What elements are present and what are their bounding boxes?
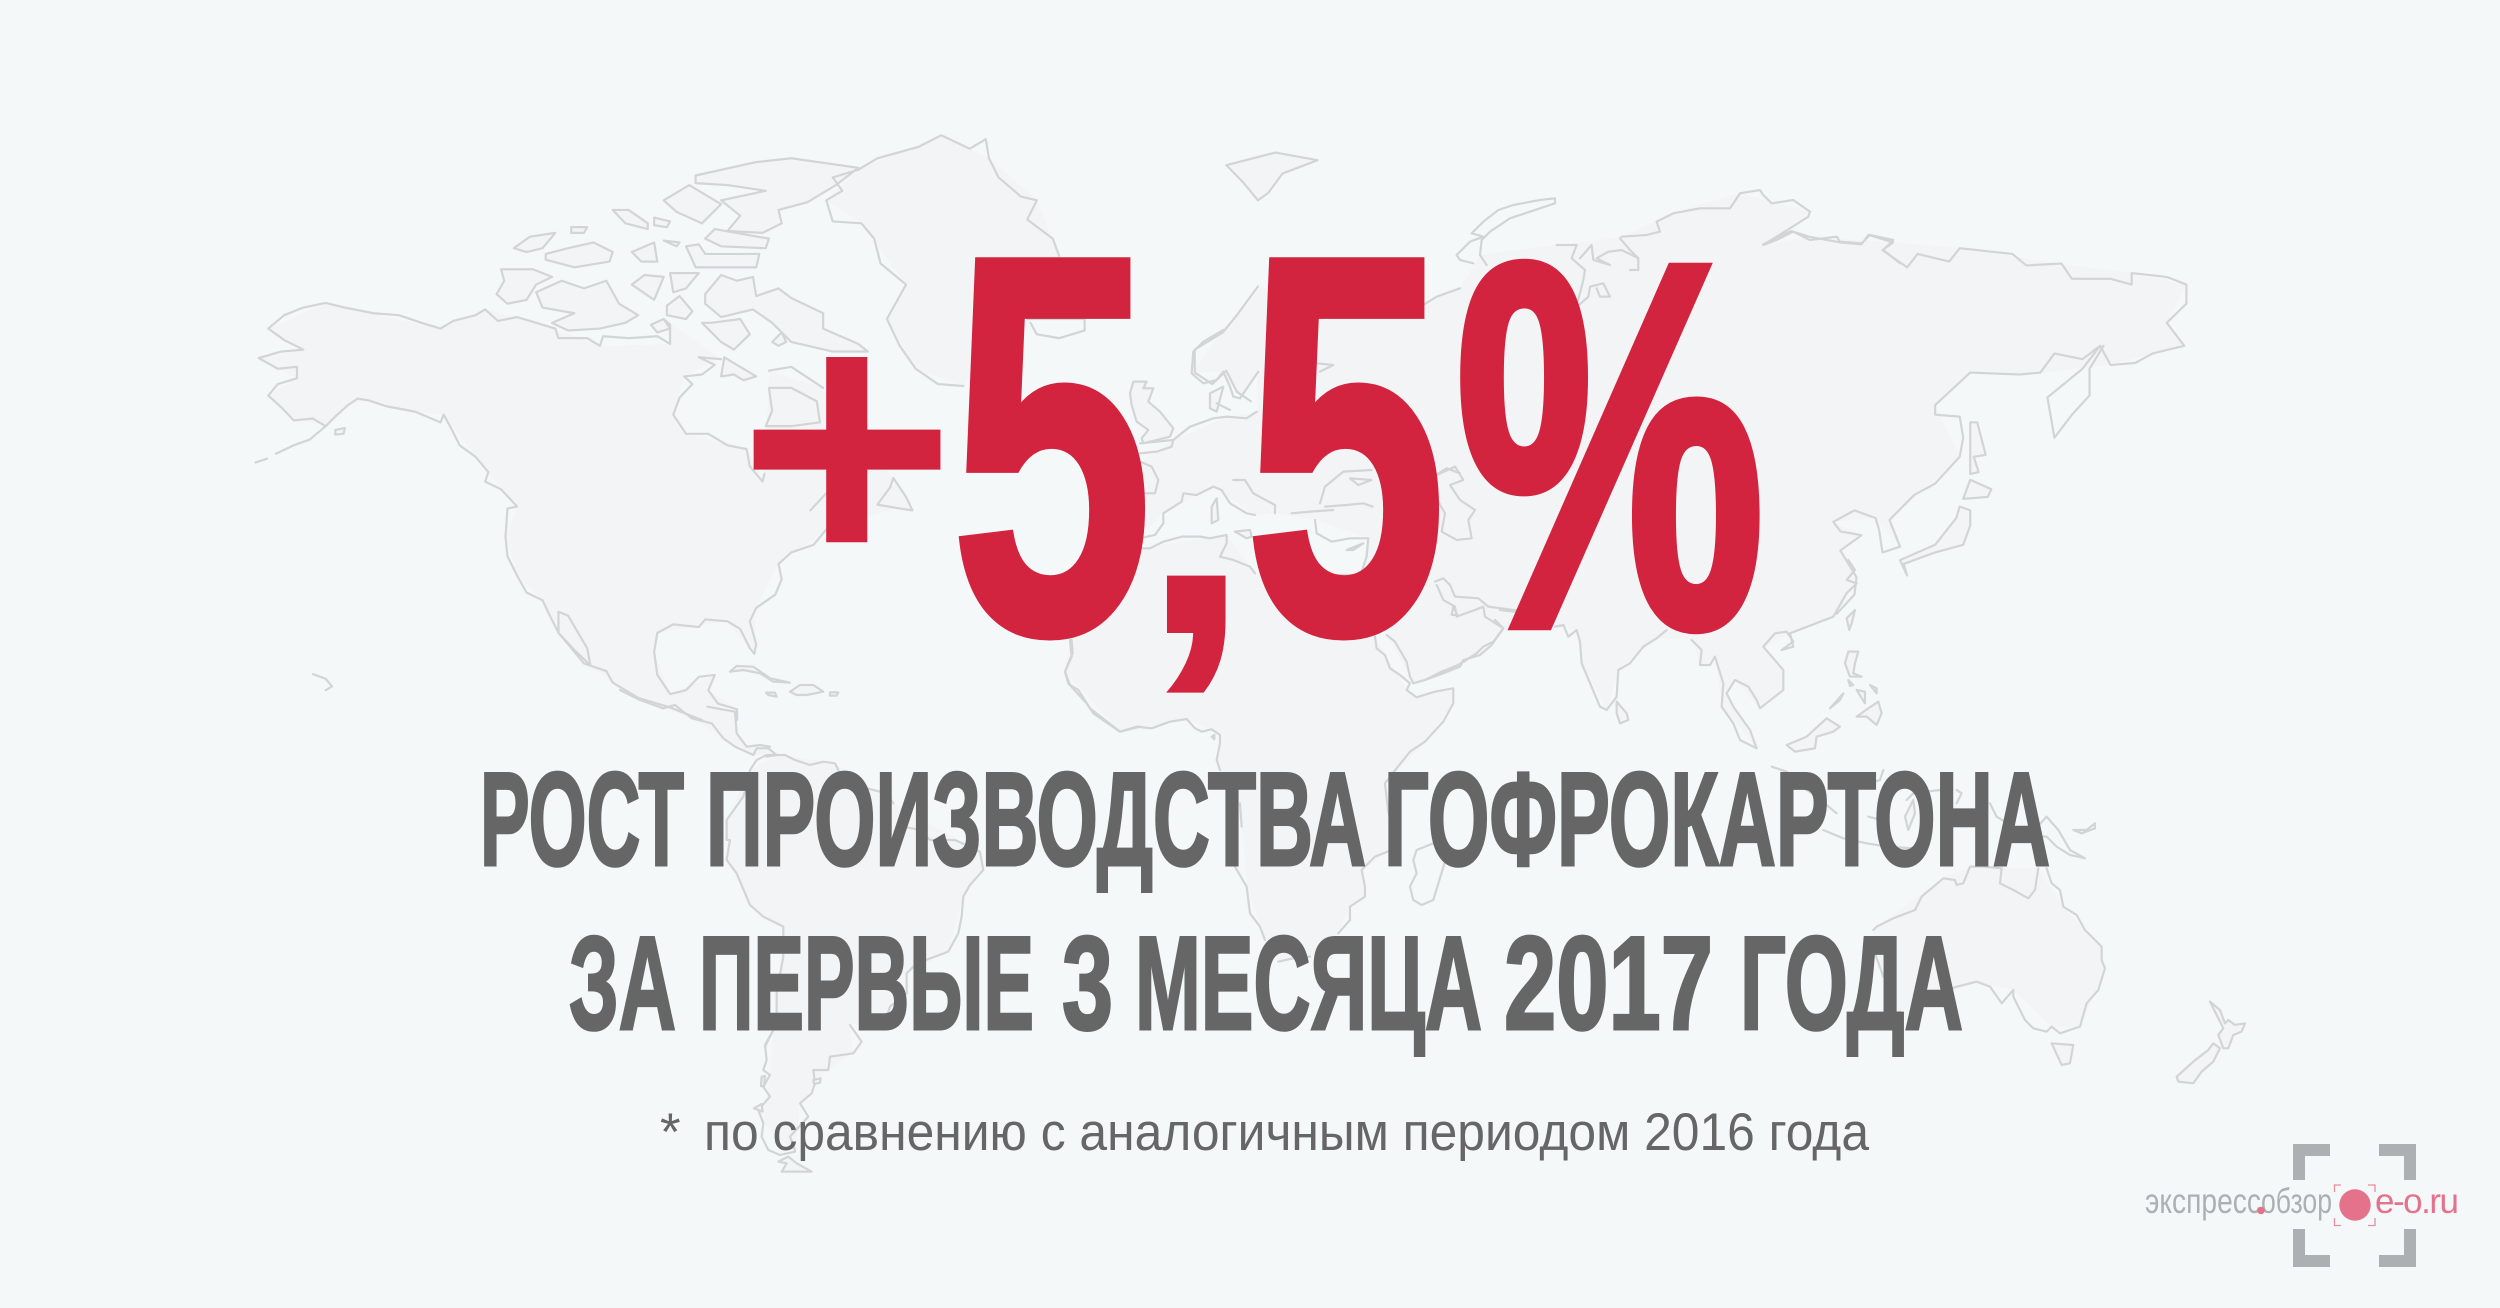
- heading: ГОФРОКАРТОНА: [1384, 746, 2050, 894]
- logo: pink lens: [2334, 1185, 2375, 1226]
- big red figure: [738, 143, 1765, 747]
- map: Australia and Oceania: [1873, 803, 2245, 1083]
- heading: ГОДА: [1740, 910, 1963, 1058]
- footnote: *: [660, 1103, 681, 1162]
- footnote: по сравнению с аналогичным периодом 2016 года: [704, 1103, 1869, 1162]
- map: South and Southeast Asia: [1500, 560, 1962, 848]
- map: Central and South America: [620, 640, 1140, 1047]
- map: East Asia and Far East: [1763, 231, 2186, 614]
- heading: ЗА: [569, 910, 676, 1058]
- heading: РОСТ: [480, 746, 684, 894]
- heading: ПРОИЗВОДСТВА: [706, 746, 1366, 894]
- heading: 3: [1062, 910, 1113, 1058]
- logo: grey wordmark: .: [2256, 1182, 2266, 1221]
- map: Europe and Mediterranean: [1130, 330, 1460, 580]
- world map background: [256, 135, 2245, 1172]
- map: Scandinavia north edge: [1195, 153, 1318, 401]
- big red figure: 5: [1244, 143, 1447, 747]
- map: Africa: [1065, 620, 1503, 962]
- logo: pink domain: e-o.ru: [2375, 1182, 2459, 1221]
- heading: 2017: [1504, 910, 1713, 1058]
- big red figure: %: [1455, 156, 1765, 735]
- heading: ПЕРВЫЕ: [699, 910, 1034, 1058]
- map: North America and Greenland: [256, 135, 1085, 720]
- logo: grey wordmark: обзор: [2261, 1182, 2332, 1221]
- map: southern tip of South America: [754, 1025, 862, 1172]
- logo: pink dot: [2257, 1207, 2265, 1214]
- map: Russia arctic coast and Middle East: [1400, 190, 1900, 680]
- big red figure: ,: [1138, 285, 1253, 715]
- logo: grey wordmark: экспресс: [2145, 1182, 2261, 1221]
- big red figure: +: [738, 241, 956, 649]
- heading: [480, 746, 2050, 1058]
- heading: МЕСЯЦА: [1135, 910, 1482, 1058]
- logo: viewfinder corners: [2293, 1144, 2416, 1267]
- logo: [2145, 1144, 2459, 1267]
- big red figure: 5: [950, 143, 1153, 747]
